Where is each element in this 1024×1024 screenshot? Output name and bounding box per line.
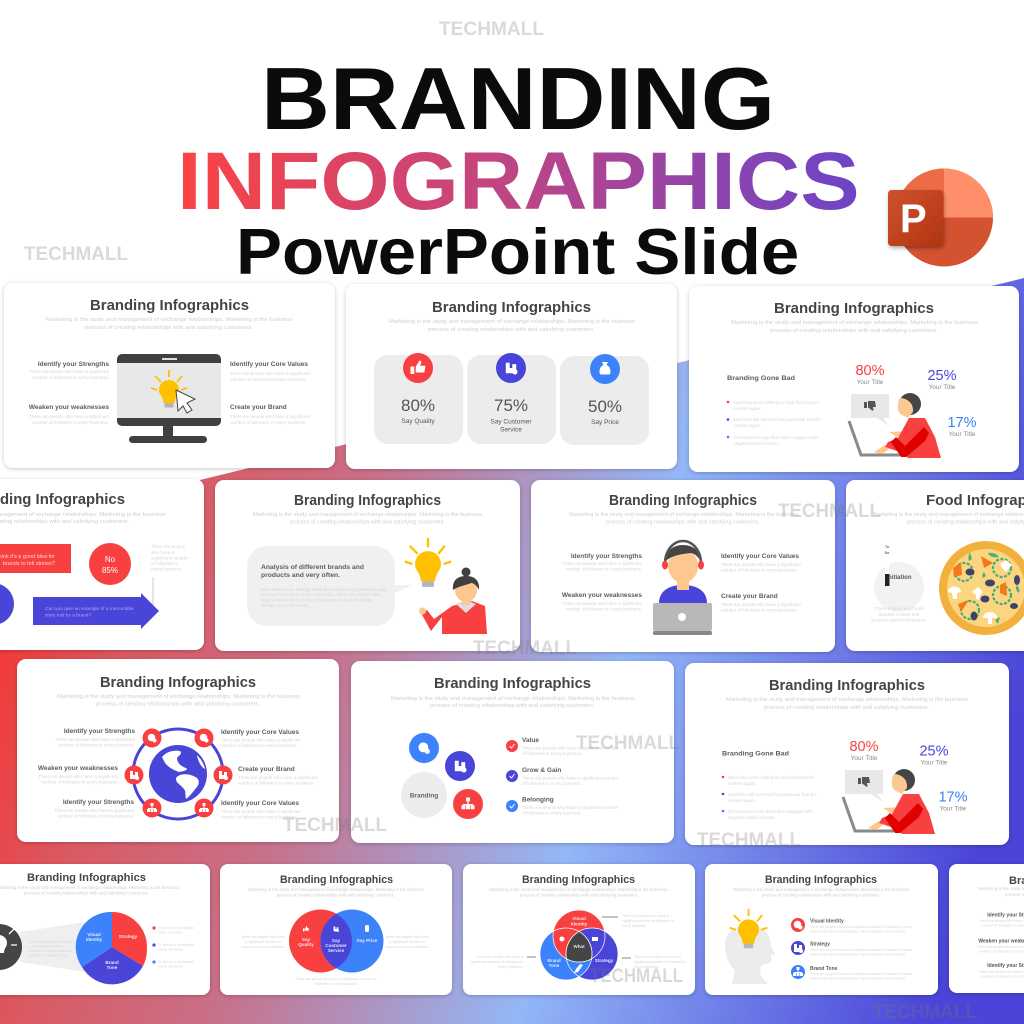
panel: branding gone bad: Branding Gone Bad — [727, 375, 795, 382]
panel: pie chart slide (cropped left) — [0, 864, 210, 995]
panel: globe slide — [17, 659, 339, 842]
panel: two-circle venn: There are people who have — [241, 935, 285, 939]
panel: headset agent: number of followers in every business. — [721, 568, 798, 572]
chart: venn diagram: Say Price — [357, 938, 378, 943]
panel: branding gone bad: 80% — [855, 363, 885, 379]
panel: branding gone bad: content again. — [733, 406, 761, 411]
stat: 75% customer service: 75% — [494, 396, 528, 415]
panel: globe slide: Weaken your weaknesses — [38, 765, 118, 772]
panel: headset agent: number of followers in every business. — [565, 606, 642, 612]
stat: 75% customer service: Say Customer — [490, 418, 532, 426]
chart: venn diagram — [289, 910, 384, 972]
panel: food infographics (cropped right): These influencers create — [874, 606, 924, 611]
illustration: person at laptop with thumbs-down bubble — [843, 769, 935, 834]
panel: branding circles checklist: of followers in every business. — [522, 751, 582, 756]
panel: arrow slide (cropped left): There are people — [151, 544, 186, 549]
panel: three stat cards: Marketing is the study and management of exchange relationships. Marketing is the business — [389, 319, 635, 325]
panel: headset agent: number of followers in every business. — [565, 566, 642, 572]
panel: monitor slide: Branding Infographics — [90, 297, 249, 314]
panel: headset agent: Branding Infographics — [609, 492, 757, 509]
panel: monitor slide: Identify your Strengths — [38, 361, 109, 368]
chart: venn diagram: Say — [332, 938, 341, 943]
panel: headset agent: Identify your Core Values — [721, 553, 799, 560]
title line: BRANDING: BRANDING — [261, 50, 775, 148]
panel: arrow slide (cropped left): of followers in — [151, 561, 179, 566]
panel: pie chart slide (cropped left): Marketing is the study and management of exchange relationships. Marketing is the business — [0, 885, 180, 890]
panel: branding gone bad: Branding Infographics — [774, 300, 934, 317]
panel: monitor slide: number of followers in every business. — [230, 377, 307, 382]
panel: head with bulb: business domain on social media. These influencers create content. — [810, 930, 906, 934]
panel: three-circle venn: Marketing is the study and management of exchange relationships. Marketing is the business — [489, 887, 668, 892]
panel: branding gone bad: Your Title — [929, 384, 956, 391]
chart: three-set venn diagram: Brand — [547, 958, 561, 963]
panel: branding circles checklist: Value — [522, 737, 539, 744]
chart: venn diagram: Customer — [325, 943, 347, 948]
panel: three-circle venn: every business. — [498, 965, 523, 969]
panel: branding gone bad — [689, 286, 1019, 472]
panel: branding gone bad: 25% — [927, 368, 957, 384]
panel: headset agent: Weaken your weaknesses — [562, 592, 642, 599]
panel: branding gone bad: negative brand content. — [733, 441, 780, 446]
panel: pie chart slide (cropped left): name out there. — [158, 948, 183, 952]
panel: pie chart slide (cropped left): name out there. — [158, 964, 183, 968]
chart: pie: Identity — [86, 937, 103, 942]
panel: monitor slide — [4, 283, 335, 468]
chart: branding bubble cluster: Branding — [410, 792, 438, 800]
panel: headset agent: number of followers in every business. — [721, 608, 798, 612]
panel: headset agent: There are people who have a significant — [721, 562, 802, 567]
panel: globe slide: There are people who have a significant — [55, 737, 136, 742]
panel: arrow slide (cropped left) — [0, 479, 204, 650]
icon: dark circle with bulb — [0, 924, 22, 970]
panel: monitor slide: Create your Brand — [230, 404, 287, 411]
stat: 75% customer service — [467, 353, 556, 444]
panel: two-circle venn: followers in every business. — [314, 982, 358, 986]
panel: branding gone bad (repeat): 25% — [919, 744, 949, 760]
panel: branding gone bad (repeat): Of consumers say they have engaged with — [728, 809, 814, 814]
panel: monitor slide: Identify your Core Values — [230, 361, 308, 368]
panel: analysis bubble: have a significant number of followers in every business — [261, 598, 373, 602]
background gradient band — [0, 278, 1024, 1024]
arrow: memorable story: Can you give an example of a memorable — [45, 606, 134, 612]
panel: headset agent: process of creating relationships with and satisfying customers. — [606, 520, 760, 526]
title line: PowerPoint Slide: PowerPoint Slide — [236, 216, 799, 289]
panel: branding gone bad (repeat): Your Title — [940, 806, 967, 812]
panel: globe slide: number of followers in every business. — [238, 780, 315, 786]
chart: three-set venn diagram: Strategy — [595, 958, 614, 963]
panel: three stat cards: process of creating relationships with and satisfying customers. — [428, 327, 595, 333]
title — [177, 50, 860, 289]
panel: branding circles checklist: of followers in every business. — [522, 810, 582, 816]
chart: pie: Visual — [87, 932, 101, 937]
panel: pie chart slide (cropped left): a significant number of — [29, 944, 65, 948]
panel: head with bulb — [705, 864, 938, 995]
panel: headset agent: Identify your Strengths — [571, 553, 642, 560]
chart: venn diagram: Quality — [298, 942, 314, 947]
panel: branding gone bad (repeat): negative brand content. — [728, 815, 775, 820]
panel: head with bulb: There are people who have a significant number of followers in every — [810, 925, 912, 929]
panel: branding gone bad: Marketing is the study and management of exchange relationships. Marketing is the business — [731, 320, 978, 326]
chart: pie: Tone — [107, 965, 118, 970]
panel: branding gone bad (repeat): 80% — [849, 739, 879, 755]
callout: No 85%: No — [105, 555, 116, 564]
panel: three-circle venn — [463, 864, 695, 995]
watermarks: TECHMALL: TECHMALL — [473, 638, 577, 659]
panel: arrow slide (cropped left): significant number — [151, 556, 188, 560]
panel: monitor slide: There are people who have a significant — [29, 414, 110, 419]
panel: analysis bubble: domain on social media. — [261, 603, 310, 608]
panel: food infographics (cropped right): Do — [885, 551, 889, 555]
panel: analysis bubble: process of creating relationships with and satisfying customers. — [290, 520, 445, 526]
illustration: head silhouette and bulb — [725, 909, 775, 984]
panel: pie chart slide (cropped left): To get your company's — [158, 960, 194, 964]
panel: head with bulb: Branding Infographics — [765, 874, 877, 886]
panel: pie chart slide (cropped left): To get your company's — [158, 943, 194, 947]
panel: globe slide: Create your Brand — [238, 766, 295, 773]
panel: two-circle venn: There are people who have — [385, 935, 429, 939]
panel: branding circles checklist — [351, 661, 674, 843]
panel: head with bulb: Brand Tone — [810, 966, 838, 972]
panel: globe slide: Branding Infographics — [100, 674, 256, 691]
panel: three-circle venn: significant number of followers in — [471, 960, 523, 964]
panel: monitor slide: process of creating relationships with and satisfying customers. — [85, 325, 253, 331]
panel: headset agent: There are people who have a significant — [721, 602, 802, 607]
panel: pie chart slide (cropped left): Branding Infographics — [27, 872, 146, 884]
panel: three-circle venn: every business. — [634, 965, 659, 969]
chart: pie: Brand — [105, 960, 119, 965]
illustration: person at laptop with thumbs-down bubble — [849, 393, 941, 458]
panel: branding gone bad: process of creating relationships with and satisfying customers. — [770, 328, 938, 334]
icon: PowerPoint logo — [888, 168, 993, 266]
panel: branding gone bad (repeat): Said they were unlikely to read that brand's — [728, 775, 815, 780]
panel: branding circles checklist: process of creating relationships with and satisfying customers. — [430, 703, 595, 709]
panel: branding gone bad (repeat): Your Title — [921, 760, 948, 766]
chart: pie — [76, 912, 147, 984]
panel: globe slide: Identify your Strengths — [63, 799, 134, 806]
panel: branding circles checklist: There are people who have a significant number — [522, 805, 619, 810]
panel: analysis bubble: an important role in online marketing. There are people who — [261, 592, 380, 597]
panel: branding circles checklist: Grow & Gain — [522, 767, 561, 774]
icon: globe with orbit nodes — [124, 728, 232, 819]
panel: globe slide: Marketing is the study and management of exchange relationships. Marketing is the business — [57, 694, 300, 700]
panel: food infographics (cropped right): To — [885, 545, 889, 549]
panel: strengths slide (cropped right) — [949, 864, 1024, 993]
panel: headset agent: Marketing is the study and management of exchange relationships. Marketing is the business — [569, 512, 798, 518]
panel: pie chart slide (cropped left): name out there. — [158, 930, 183, 934]
arrow: memorable story — [33, 593, 159, 629]
panel: monitor slide: There are people who have a significant — [230, 371, 311, 376]
panel: two-circle venn: a significant number of — [245, 940, 281, 944]
panel: branding gone bad: 17% — [947, 415, 977, 431]
panel: pie chart slide (cropped left): domain on social media. — [29, 954, 68, 958]
panel: three-circle venn: significant number of followers in — [622, 919, 674, 923]
panel: branding gone bad (repeat): Said they will not read that particular brand's — [728, 792, 817, 797]
panel: headset agent: Create your Brand — [721, 593, 778, 600]
stat: 50% say price: Say Price — [591, 419, 619, 426]
panel: three-circle venn: There are people who have a — [622, 914, 669, 918]
panel: arrow slide (cropped left): every business. — [151, 566, 182, 572]
panel: arrow slide (cropped left): brands to tell stories? — [3, 561, 55, 567]
panel: branding gone bad: Said they will not read that particular brand's — [733, 417, 822, 422]
panel: globe slide: number of followers in every business. — [41, 780, 118, 784]
panel: pie chart slide (cropped left): There are people who have — [29, 940, 73, 944]
panel: three-circle venn: every business. — [622, 924, 647, 928]
panel: branding gone bad: Of consumers say they have engaged with — [733, 435, 819, 440]
watermarks: TECHMALL: TECHMALL — [590, 966, 683, 987]
panel: globe slide: There are people who have a significant — [54, 808, 135, 813]
panel: branding circles checklist: Marketing is the study and management of exchange relationships. Marketing is the business — [391, 696, 635, 702]
stat: 80% say quality: 80% — [401, 396, 435, 415]
panel: three-circle venn: There are people who have a — [476, 955, 523, 959]
chart: three-set venn diagram: Visual — [572, 916, 586, 921]
panel: two-circle venn: Marketing is the study and management of exchange relationships. Marketing is the business — [248, 887, 425, 892]
panel: globe slide: number of followers in every business. — [221, 814, 298, 820]
icon: PowerPoint logo: P — [900, 197, 927, 241]
watermarks: TECHMALL: TECHMALL — [576, 733, 680, 754]
illustration: woman presenting — [419, 568, 487, 634]
panel: food infographics (cropped right) — [846, 480, 1024, 651]
panel: two-circle venn — [220, 864, 452, 995]
panel: three stat cards — [346, 284, 677, 469]
panel: headset agent — [531, 480, 835, 652]
panel: head with bulb: business domain on social media. These influencers create content. — [810, 976, 906, 980]
panel: monitor slide: number of followers in every business. — [230, 420, 307, 425]
panel: branding gone bad (repeat) — [685, 663, 1009, 845]
panel: food infographics (cropped right): Initiation — [886, 575, 912, 581]
panel: globe slide: There are people who have a significant — [238, 775, 319, 780]
stat: 80% say quality — [374, 353, 463, 444]
panel: monitor slide: There are people who have a significant — [29, 369, 110, 374]
panel: two-circle venn: followers in every business — [242, 945, 285, 949]
panel: head with bulb: Strategy — [810, 942, 830, 948]
panel: branding gone bad (repeat): Branding Gone Bad — [722, 750, 789, 758]
callout: No 85% — [89, 543, 131, 585]
callout: No 85%: 85% — [102, 566, 118, 575]
illustration: pizza — [939, 541, 1024, 635]
panel: branding circles checklist: Belonging — [522, 796, 554, 804]
panel: monitor slide: number of followers in every business. — [32, 420, 109, 425]
panel: branding gone bad (repeat): content again. — [728, 798, 756, 803]
panel: globe slide: There are people who have a significant — [221, 738, 302, 742]
panel: branding circles checklist: Branding Infographics — [434, 675, 591, 692]
panel: branding circles checklist: There are people who have a significant number — [522, 776, 619, 780]
panel: globe slide: Identify your Strengths — [64, 728, 135, 735]
panel: three-circle venn: process of creating relationships with and satisfying customers. — [520, 892, 638, 898]
panel: head with bulb: process of creating relationships with and satisfying customers. — [762, 892, 880, 898]
arrow: connector lines — [527, 917, 631, 958]
arrow: memorable story: story told by a brand? — [45, 612, 91, 618]
panel: branding gone bad: content again. — [733, 423, 761, 428]
panel: head with bulb: There are people who have a significant number of followers in every — [810, 972, 912, 976]
panel: analysis bubble: products and very often. — [261, 572, 340, 579]
panel: three-circle venn: Branding Infographics — [522, 874, 635, 886]
panel: globe slide: There are people who have a significant — [38, 774, 119, 779]
stat: 50% say price: 50% — [588, 397, 622, 416]
chart: three-set venn diagram: Identity — [571, 922, 588, 926]
chart: three-set venn diagram — [540, 910, 618, 980]
panel: analysis bubble: Analysis of different brands and — [261, 564, 364, 571]
illustration: person with headset and laptop — [653, 541, 712, 635]
panel: three stat cards: Branding Infographics — [432, 299, 591, 316]
watermarks: TECHMALL: TECHMALL — [24, 244, 128, 265]
panel: headset agent: There are people who have a significant — [562, 561, 643, 566]
panel: branding gone bad: Your Title — [949, 431, 976, 438]
panel: monitor slide: number of followers in every business. — [32, 375, 109, 380]
panel: food infographics (cropped right): provides useful information. — [871, 618, 927, 622]
panel: head with bulb: business domain on social media. These influencers create content. — [810, 952, 906, 956]
watermarks: TECHMALL: TECHMALL — [697, 830, 801, 851]
title line: INFOGRAPHICS: INFOGRAPHICS — [177, 136, 860, 227]
chart: venn diagram: Service — [328, 948, 345, 953]
panel: two-circle venn: followers in every business — [386, 945, 429, 949]
watermarks: TECHMALL: TECHMALL — [283, 815, 387, 836]
panel: analysis bubble: Most businesses already know that social media platforms play — [261, 587, 387, 592]
panel: two-circle venn: Branding Infographics — [280, 874, 393, 886]
panel: analysis bubble: Marketing is the study and management of exchange relationships. Marketing is the business — [253, 512, 482, 518]
panel: three-circle venn: There are people who have a — [634, 955, 681, 959]
panel: two-circle venn: process of creating relationships with and satisfying customers. — [277, 892, 395, 898]
panel: globe slide: process of creating relationships with and satisfying customers. — [96, 702, 260, 708]
panel: analysis bubble — [215, 480, 520, 651]
panel: branding gone bad (repeat): Marketing is the study and management of exchange relationships. Marketing is the business — [726, 697, 968, 703]
panel: monitor slide: There are people who have a significant — [230, 414, 311, 419]
panel: globe slide: number of followers in every business. — [57, 814, 134, 818]
watermarks: TECHMALL: TECHMALL — [778, 501, 881, 522]
icon: monitor with bulb and cursor — [117, 354, 221, 443]
panel: branding gone bad (repeat): Your Title — [851, 755, 878, 762]
chart: three-set venn diagram: What — [573, 944, 585, 949]
panel: branding circles checklist: of followers in every business. — [522, 781, 582, 786]
panel: branding circles checklist: There are people who have a significant number — [522, 746, 619, 750]
watermarks: TECHMALL: TECHMALL — [439, 19, 544, 40]
panel: globe slide: Identify your Core Values — [221, 800, 299, 807]
panel: headset agent: There are people who have a significant — [562, 601, 643, 606]
panel: head with bulb: Visual Identity — [810, 918, 844, 924]
stat: 50% say price — [560, 354, 649, 445]
chart: venn diagram: Say — [302, 937, 311, 942]
panel: analysis bubble: Branding Infographics — [294, 492, 441, 509]
panel: pie chart slide (cropped left): process of creating relationships with and satisfying customers. — [24, 890, 149, 896]
panel: branding gone bad (repeat): process of creating relationships with and satisfying customers. — [764, 705, 929, 711]
icon: light bulb — [405, 538, 451, 587]
panel: monitor slide: Marketing is the study and management of exchange relationships. Marketing is the business — [46, 317, 293, 323]
panel: arrow slide (cropped left): who have a — [151, 550, 175, 555]
panel: food infographics (cropped right): detailed content that — [879, 612, 920, 617]
panel: branding gone bad: Your Title — [857, 379, 884, 386]
panel: globe slide: number of followers in every business. — [221, 743, 298, 748]
panel: branding gone bad (repeat): 17% — [938, 790, 968, 806]
chart: branding bubble cluster — [401, 733, 483, 819]
chart: pie: Strategy — [119, 934, 138, 939]
panel: branding gone bad (repeat): Branding Infographics — [769, 677, 925, 694]
panel: two-circle venn: a significant number of — [389, 940, 425, 944]
chart: three-set venn diagram: Tone — [549, 963, 560, 968]
panel: two-circle venn: There are people who have a significant number of — [296, 977, 376, 981]
panel: three-circle venn: significant number of followers in — [634, 960, 686, 964]
watermarks: TECHMALL: TECHMALL — [873, 1002, 977, 1023]
panel: head with bulb: Marketing is the study and management of exchange relationships. Marketing is the business — [733, 887, 910, 892]
panel: branding gone bad (repeat): content again. — [728, 781, 756, 786]
panel: monitor slide: Weaken your weaknesses — [29, 404, 109, 411]
panel: pie chart slide (cropped left): To get your company's — [158, 926, 194, 930]
panel: branding gone bad: Said they were unlikely to read that brand's — [733, 400, 820, 405]
panel: pie chart slide (cropped left): followers in every business — [29, 949, 72, 953]
panel: globe slide: There are people who have a significant — [221, 809, 302, 814]
panel: head with bulb: There are people who have a significant number of followers in every — [810, 948, 912, 952]
panel: globe slide: number of followers in every business. — [58, 742, 135, 748]
panel: globe slide: Identify your Core Values — [221, 729, 299, 736]
stat: 75% customer service: Service — [500, 426, 522, 434]
stat: 80% say quality: Say Quality — [401, 418, 435, 425]
